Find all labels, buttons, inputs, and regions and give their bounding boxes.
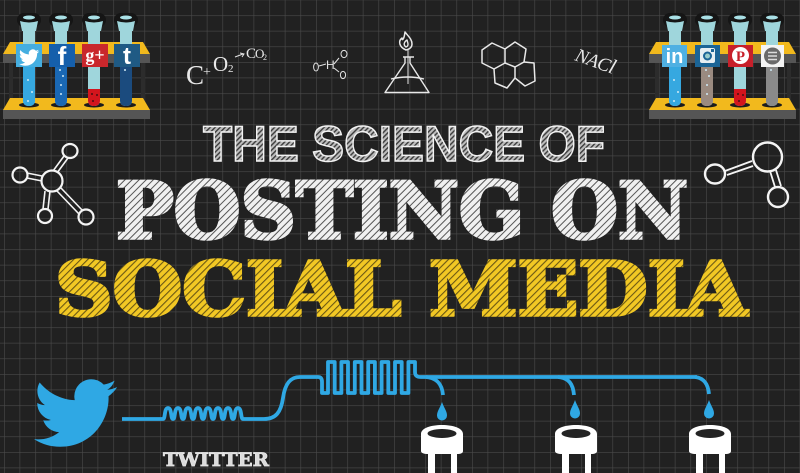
branch pipe 2 xyxy=(558,377,574,395)
sketch: O-H-O formula: H xyxy=(326,58,335,72)
sketch: carbon dioxide equation: 2 xyxy=(263,53,267,62)
sketch: O-H-O formula xyxy=(314,50,347,79)
icon: twitter xyxy=(16,44,42,67)
diagram: twitter flow line with coils xyxy=(122,362,709,419)
drop 2 xyxy=(570,400,580,419)
icon: google plus xyxy=(82,44,108,67)
test tube mouth 2 xyxy=(555,425,597,473)
test tube: instagram xyxy=(695,13,719,106)
icon: google plus: g+ xyxy=(85,45,105,65)
icon: tumblr xyxy=(114,43,140,70)
sketch: carbon dioxide equation xyxy=(186,46,267,90)
molecule: right xyxy=(705,142,788,207)
test tube: facebook xyxy=(49,13,73,106)
test tube: buffer xyxy=(760,13,784,106)
test tube: pinterest xyxy=(728,13,752,106)
test tube mouth 3 xyxy=(689,425,731,473)
sketch: flask with flame xyxy=(385,32,429,92)
icon: instagram xyxy=(695,45,720,67)
sketch: carbon dioxide equation: C xyxy=(246,46,256,62)
sketch: carbon dioxide equation: 2 xyxy=(228,63,234,75)
right test tube rack with social icons xyxy=(649,13,796,119)
sketch: carbon dioxide equation: + xyxy=(203,65,211,80)
drop 1 xyxy=(437,402,447,420)
icon: linkedin xyxy=(662,45,687,68)
icon: pinterest xyxy=(728,45,753,67)
left test tube rack with social icons xyxy=(3,13,150,119)
icon: buffer xyxy=(761,45,784,67)
test tube mouth 1 xyxy=(421,425,463,473)
label: twitter: TWITTER xyxy=(163,449,269,471)
coil line into serpentine xyxy=(122,362,697,419)
title: posting on: POSTING ON xyxy=(116,166,688,257)
molecule: left xyxy=(12,144,94,224)
test tube: google plus xyxy=(82,13,106,106)
sketch: carbon dioxide equation: O xyxy=(255,46,264,61)
icon: linkedin: in xyxy=(666,46,683,68)
icon: facebook xyxy=(49,41,75,71)
sketch: NaCl text: NACl xyxy=(571,42,619,79)
test tube: twitter xyxy=(17,13,41,106)
icon: tumblr: t xyxy=(123,43,131,70)
icon: pinterest: P xyxy=(736,49,745,65)
title: the science of: THE SCIENCE OF xyxy=(203,116,605,172)
sketch: carbon dioxide equation: O xyxy=(213,52,228,76)
branch pipe 3 xyxy=(695,377,709,394)
branch pipe 1 xyxy=(426,377,443,395)
test tube: linkedin xyxy=(663,13,687,106)
sketch: carbon dioxide equation: C xyxy=(186,60,204,90)
drop 3 xyxy=(704,400,714,419)
sketch: hexagon molecule xyxy=(482,42,535,88)
icon: facebook: f xyxy=(58,41,67,71)
test tube: tumblr xyxy=(114,13,138,106)
title: social media: SOCIAL MEDIA xyxy=(55,247,749,333)
icon: twitter bird xyxy=(34,379,117,447)
